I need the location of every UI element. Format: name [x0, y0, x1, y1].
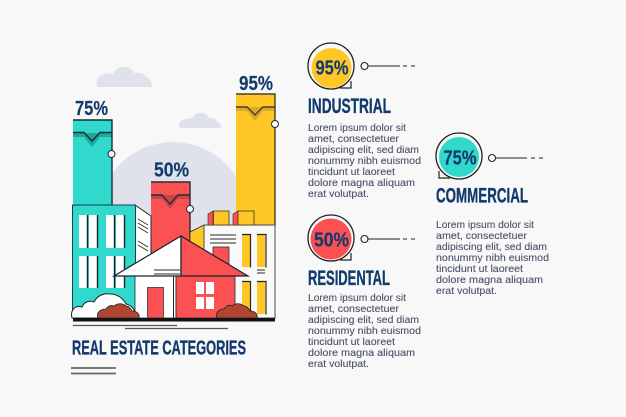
badge: 75%	[436, 133, 482, 179]
bar: teal 75%	[73, 98, 115, 210]
badge: 75%: 75%	[444, 148, 477, 170]
title: REAL ESTATE CATEGORIES	[72, 338, 246, 360]
bar: yellow 95%	[236, 73, 278, 229]
heading: COMMERCIAL	[436, 184, 528, 208]
body text: erat volutpat.	[308, 189, 369, 200]
body text: erat volutpat.	[436, 286, 497, 297]
background circle	[98, 142, 248, 292]
cloud: right	[179, 113, 221, 128]
panel: residental	[308, 215, 421, 370]
body text: amet, consectetuer	[308, 134, 400, 145]
body text: dolore magna aliquam	[308, 178, 415, 189]
connector	[368, 238, 415, 240]
bar: red 50%: 50%	[154, 160, 189, 182]
bar: yellow 95%: 95%	[239, 73, 273, 95]
body text: dolore magna aliquam	[308, 348, 415, 359]
body text	[436, 220, 549, 297]
body text: adipiscing elit, sed diam	[436, 242, 547, 253]
connector	[495, 157, 543, 159]
ground line	[73, 318, 275, 322]
bushes	[72, 294, 257, 318]
body text: tincidunt ut laoreet	[308, 337, 395, 348]
badge: 95%	[308, 43, 354, 89]
bar: red 50%	[151, 160, 194, 262]
body text: adipiscing elit, sed diam	[308, 315, 419, 326]
body text: adipiscing elit, sed diam	[308, 145, 419, 156]
body text: nonummy nibh euismod	[308, 156, 421, 167]
cloud: left	[97, 67, 152, 87]
body text: Lorem ipsum dolor sit	[308, 293, 406, 304]
body text: nonummy nibh euismod	[436, 253, 549, 264]
building: white apartment with yellow windows	[190, 211, 275, 318]
body text: Lorem ipsum dolor sit	[436, 220, 534, 231]
connector	[368, 65, 415, 67]
heading: INDUSTRIAL	[308, 95, 391, 118]
badge: 95%: 95%	[316, 58, 349, 80]
building: teal office	[72, 205, 151, 318]
title underline	[71, 368, 116, 374]
body text	[308, 293, 421, 370]
body text: erat volutpat.	[308, 359, 369, 370]
body text: tincidunt ut laoreet	[436, 264, 523, 275]
bar: teal 75%: 75%	[75, 98, 108, 120]
ground shadow lines	[73, 326, 228, 328]
badge: 50%	[308, 215, 354, 261]
body text: tincidunt ut laoreet	[308, 167, 395, 178]
body text	[308, 123, 421, 200]
body text: dolore magna aliquam	[436, 275, 543, 286]
body text: amet, consectetuer	[436, 231, 528, 242]
heading: RESIDENTAL	[308, 267, 390, 290]
panel: commercial	[436, 133, 549, 297]
badge: 50%: 50%	[314, 230, 349, 252]
body text: nonummy nibh euismod	[308, 326, 421, 337]
panel: industrial	[308, 43, 421, 200]
body text: amet, consectetuer	[308, 304, 400, 315]
house	[114, 236, 248, 318]
body text: Lorem ipsum dolor sit	[308, 123, 406, 134]
